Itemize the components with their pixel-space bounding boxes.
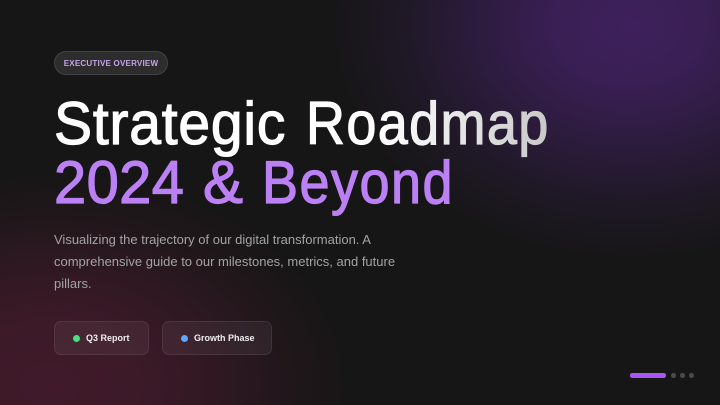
pagination indicator	[630, 373, 694, 378]
title line 2: 2024	[54, 149, 184, 216]
active page bar	[630, 373, 666, 378]
icon: blue dot	[181, 335, 188, 342]
subtitle: comprehensive guide to our milestones, metrics, and future	[54, 254, 395, 269]
title line 2	[54, 149, 454, 216]
label: Growth Phase: Growth Phase	[194, 333, 255, 343]
card: Q3 Report	[54, 321, 149, 355]
page dot 2	[680, 373, 684, 378]
label: Q3 Report: Q3 Report	[86, 333, 130, 343]
title line 2: &	[203, 149, 243, 216]
subtitle: Visualizing the trajectory of our digital transformation. A	[54, 232, 371, 247]
page dot 3	[689, 373, 694, 378]
title line 1	[54, 90, 550, 158]
title line 1: Strategic	[54, 90, 286, 157]
subtitle	[54, 232, 395, 291]
badge: executive overview	[54, 51, 168, 75]
title line 1: Roadmap	[306, 90, 550, 157]
page dot 1	[671, 373, 676, 378]
icon: green dot	[73, 335, 80, 342]
badge: executive overview: EXECUTIVE OVERVIEW	[64, 59, 158, 68]
title line 2: Beyond	[262, 149, 454, 216]
card: Growth Phase	[162, 321, 272, 355]
subtitle: pillars.	[54, 276, 92, 291]
